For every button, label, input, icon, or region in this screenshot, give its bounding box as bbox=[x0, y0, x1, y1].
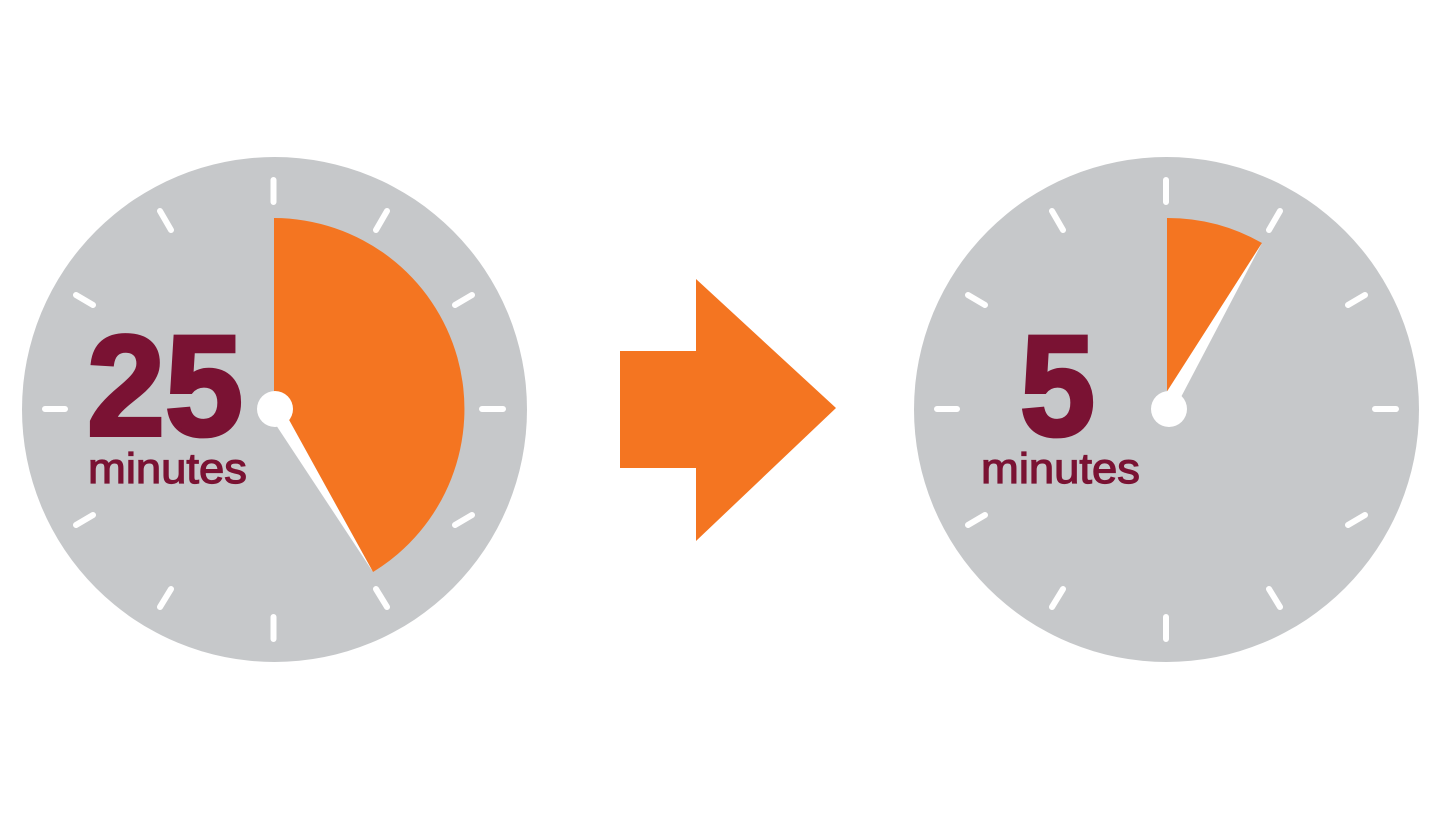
tick marks bbox=[937, 180, 1396, 639]
clock face bbox=[914, 157, 1419, 662]
clock face bbox=[22, 157, 527, 662]
arrow bbox=[620, 279, 836, 541]
white clock hand bbox=[1166, 243, 1262, 399]
value: 25: 25 bbox=[87, 307, 243, 466]
white clock hand bbox=[276, 418, 373, 572]
clock hub bbox=[1151, 391, 1187, 427]
value: 5: 5 bbox=[1020, 307, 1095, 466]
clock hub bbox=[257, 391, 293, 427]
orange 25-minute wedge bbox=[274, 218, 464, 572]
orange 5-minute wedge bbox=[1167, 218, 1262, 392]
tick marks bbox=[45, 180, 503, 639]
clock: 25 minutes bbox=[22, 157, 527, 662]
label: minutes: minutes bbox=[981, 445, 1140, 493]
label: minutes: minutes bbox=[88, 445, 247, 493]
clock: 5 minutes bbox=[914, 157, 1419, 662]
